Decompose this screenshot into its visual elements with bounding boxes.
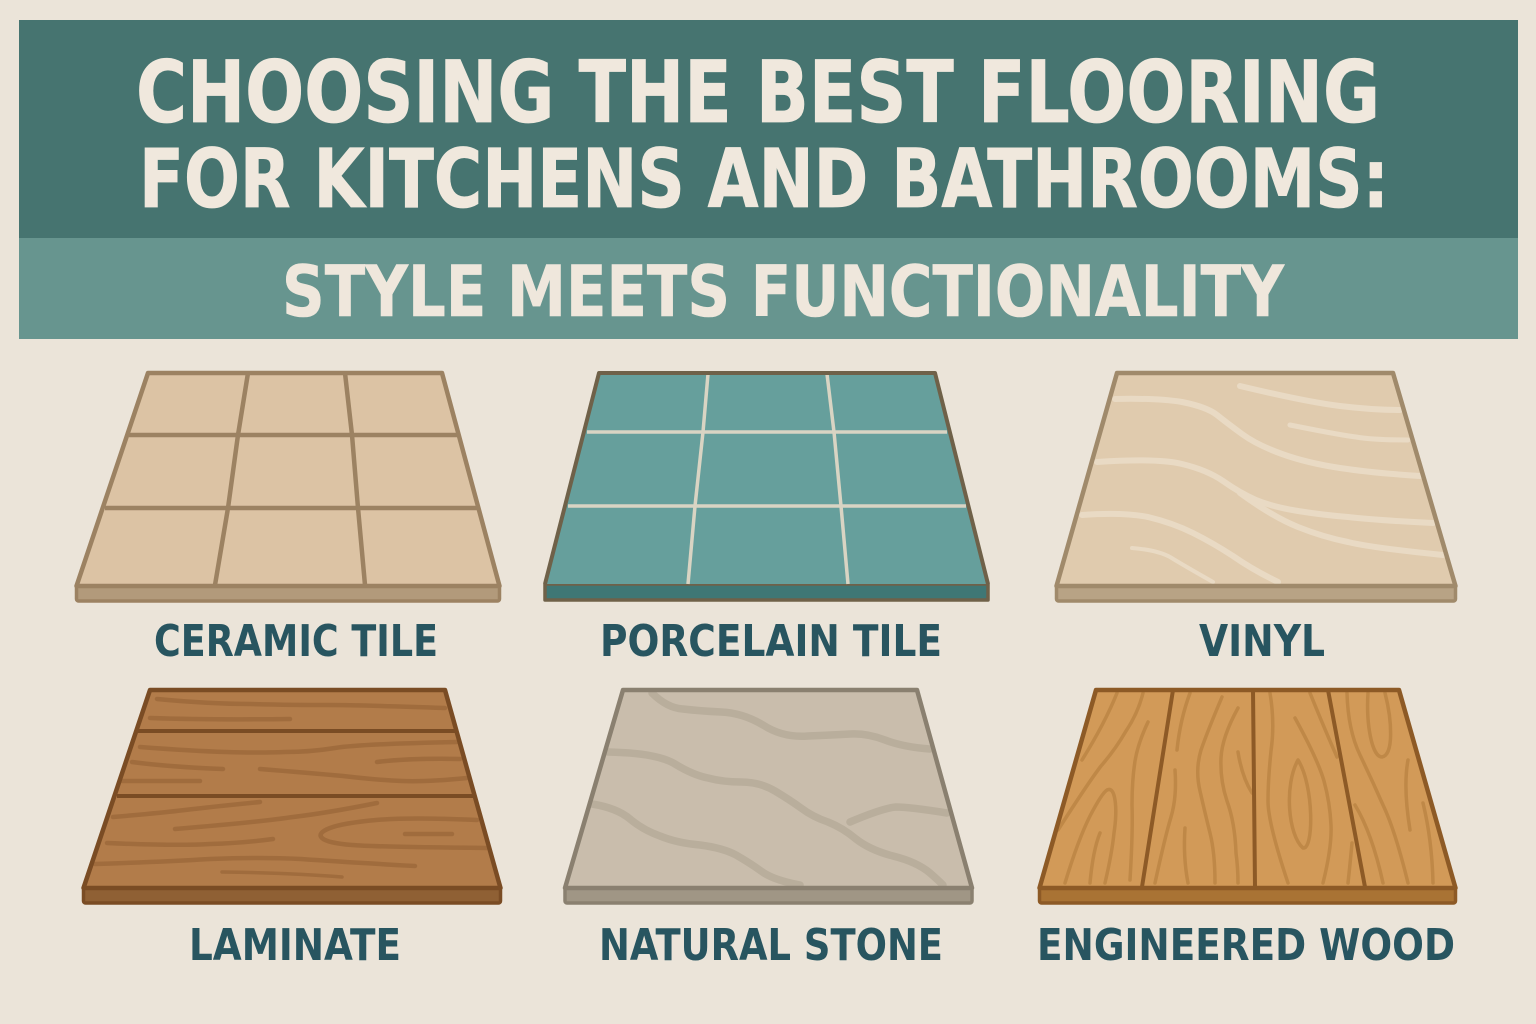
panel: ceramic tile [76,373,500,667]
panel: laminate [84,690,500,971]
engineered wood grain [1058,693,1433,883]
title banner [19,20,1518,238]
stone veins [592,693,947,885]
label: VINYL [1199,616,1325,667]
panel: vinyl [1056,373,1456,667]
subtitle text: STYLE MEETS FUNCTIONALITY [282,251,1285,333]
panel: porcelain tile [545,373,988,667]
label: LAMINATE [189,920,401,971]
label: CERAMIC TILE [154,616,438,667]
label: NATURAL STONE [599,920,943,971]
subtitle banner [19,238,1518,339]
vinyl swirls [1082,386,1443,582]
laminate wood grain [95,699,487,877]
label: PORCELAIN TILE [600,616,942,667]
label: ENGINEERED WOOD [1037,920,1455,971]
panel: engineered wood [1037,690,1456,971]
panel: natural stone [565,690,972,971]
